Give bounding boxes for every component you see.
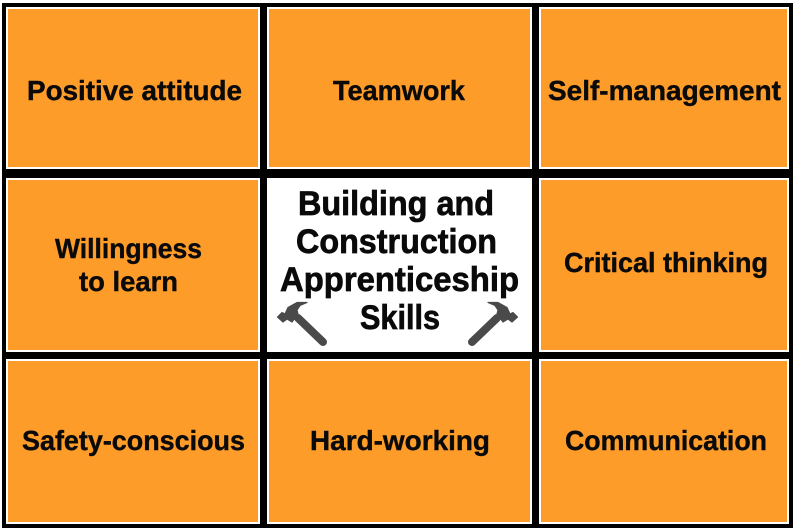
- panel: Positive attitude: [7, 8, 259, 168]
- panel: Self-management: Self-management: [548, 75, 781, 106]
- title: [280, 185, 519, 337]
- panel: Teamwork: Teamwork: [333, 75, 465, 106]
- panel: Willingness to learn: Willingness: [55, 233, 202, 264]
- panel: Willingness to learn: to learn: [79, 266, 178, 297]
- panel: Safety-conscious: Safety-conscious: [22, 425, 245, 456]
- panel: Teamwork: [268, 8, 531, 168]
- title: Construction: [296, 223, 497, 261]
- panel: Positive attitude: Positive attitude: [27, 75, 242, 106]
- title: Skills: [360, 299, 440, 337]
- panel: Hard-working: [268, 360, 531, 523]
- title: Building and: [298, 185, 494, 223]
- panel: Safety-conscious: [7, 360, 259, 523]
- panel: Self-management: [540, 8, 788, 168]
- panel: Critical thinking: [540, 179, 788, 351]
- title: Apprenticeship: [280, 261, 519, 299]
- icon: right hammer: [472, 302, 518, 342]
- panel: Willingness to learn: [7, 179, 259, 351]
- panel: Critical thinking: Critical thinking: [564, 247, 768, 278]
- panel: Hard-working: Hard-working: [310, 425, 490, 456]
- panel: Communication: Communication: [565, 425, 767, 456]
- panel: Communication: [540, 360, 788, 523]
- panel: center title: [267, 178, 532, 352]
- icon: left hammer: [278, 302, 323, 342]
